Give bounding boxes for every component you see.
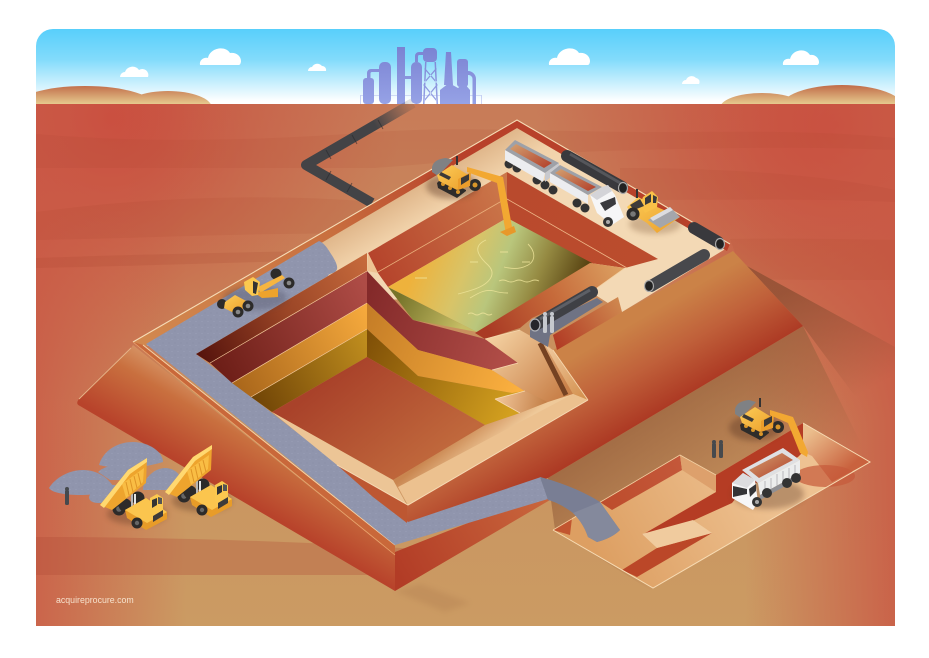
gravel ramp [540, 477, 620, 542]
workers near excavator [712, 440, 723, 458]
drain post [540, 343, 566, 395]
stacked pipes [567, 154, 724, 292]
water [388, 218, 592, 332]
plateau rim [133, 120, 730, 555]
mine shadows [395, 266, 895, 612]
lower excavated pit [196, 253, 588, 523]
pipe three [644, 255, 704, 292]
excavation floor [553, 423, 870, 588]
red wedge below water [475, 263, 625, 339]
right slope of the mine [407, 251, 803, 523]
website credit: acquireprocure.com [56, 595, 134, 605]
excavator in the lower dig [729, 398, 808, 457]
tipper truck [732, 448, 804, 510]
pipe landing block [530, 298, 603, 347]
excavation walls [600, 455, 682, 510]
pipe two [694, 228, 724, 250]
excavator boom [770, 410, 808, 457]
pit right wall [507, 172, 658, 268]
desert ground [36, 104, 895, 626]
far corner slope [803, 430, 869, 482]
motor grader [217, 268, 294, 318]
excavator boom [467, 167, 514, 234]
strata on the left wall [196, 253, 367, 363]
road roller [626, 189, 681, 234]
gravel stockpiles [49, 442, 181, 503]
plateau deck [143, 128, 727, 354]
worker near stockpile [65, 487, 69, 505]
sky [36, 29, 895, 105]
dump truck one [100, 458, 167, 530]
left slope of the mine [77, 345, 395, 591]
side deck wall [553, 297, 622, 350]
front face [395, 492, 550, 591]
strata on the right wall [367, 271, 518, 370]
upper flooded pit [367, 172, 658, 339]
green bank [388, 287, 477, 332]
front tan rim [393, 394, 588, 505]
factory [360, 47, 482, 104]
underground pipeline [306, 103, 413, 203]
bottom right excavation [553, 423, 870, 588]
clouds [120, 48, 819, 84]
water ripples [415, 240, 539, 315]
dump truck two [165, 445, 232, 517]
lower red cut [622, 533, 712, 577]
inner mound [642, 520, 712, 548]
gravel haul road [146, 241, 548, 545]
hills [36, 85, 895, 104]
excavator on the deck [426, 156, 516, 236]
tan corner wedge [367, 253, 378, 273]
truck with trailer [550, 165, 624, 227]
pit left wall [368, 172, 507, 287]
pipe one [567, 154, 628, 194]
drainage pipe [530, 290, 592, 331]
pit floor [272, 357, 485, 480]
stepped terraces [485, 330, 573, 402]
workers on pipe [543, 312, 554, 333]
dump trailer one [504, 140, 559, 194]
